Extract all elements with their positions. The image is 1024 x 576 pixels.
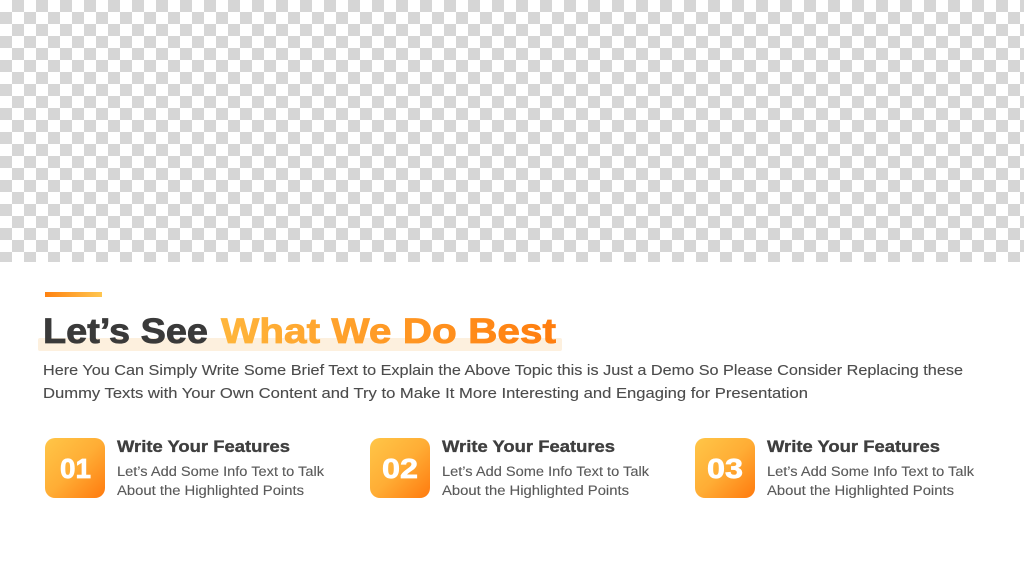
title highlight band <box>38 338 562 351</box>
icon: number badge 02 <box>370 438 430 498</box>
feature 01 text: About the Highlighted Points <box>117 483 304 498</box>
title: Let’s See <box>43 312 208 351</box>
icon: number badge 01: 01 <box>60 453 91 484</box>
description text: Here You Can Simply Write Some Brief Text to Explain the Above Topic this is Just a Demo So Please Consider Replacing these <box>43 362 963 379</box>
feature 03 text <box>767 464 974 498</box>
description text <box>43 362 963 402</box>
feature 03 text: About the Highlighted Points <box>767 483 954 498</box>
feature 01 heading: Write Your Features <box>117 437 290 456</box>
title: What We Do Best <box>221 312 556 351</box>
feature 02 text: About the Highlighted Points <box>442 483 629 498</box>
checkerboard image placeholder <box>0 0 1024 262</box>
title <box>43 312 556 351</box>
accent bar <box>45 292 102 297</box>
description text: Dummy Texts with Your Own Content and Try to Make It More Interesting and Engaging for Presentation <box>43 385 808 402</box>
feature 02 heading: Write Your Features <box>442 437 615 456</box>
feature 01 text: Let’s Add Some Info Text to Talk <box>117 464 324 479</box>
feature 01 <box>45 437 324 498</box>
feature 03 text: Let’s Add Some Info Text to Talk <box>767 464 974 479</box>
icon: number badge 02: 02 <box>382 453 418 484</box>
feature 03 <box>695 437 974 498</box>
feature 03 heading: Write Your Features <box>767 437 940 456</box>
feature 02 text <box>442 464 649 498</box>
icon: number badge 03 <box>695 438 755 498</box>
feature 02 <box>370 437 649 498</box>
feature 01 text <box>117 464 324 498</box>
icon: number badge 03: 03 <box>707 453 743 484</box>
feature 02 text: Let’s Add Some Info Text to Talk <box>442 464 649 479</box>
icon: number badge 01 <box>45 438 105 498</box>
